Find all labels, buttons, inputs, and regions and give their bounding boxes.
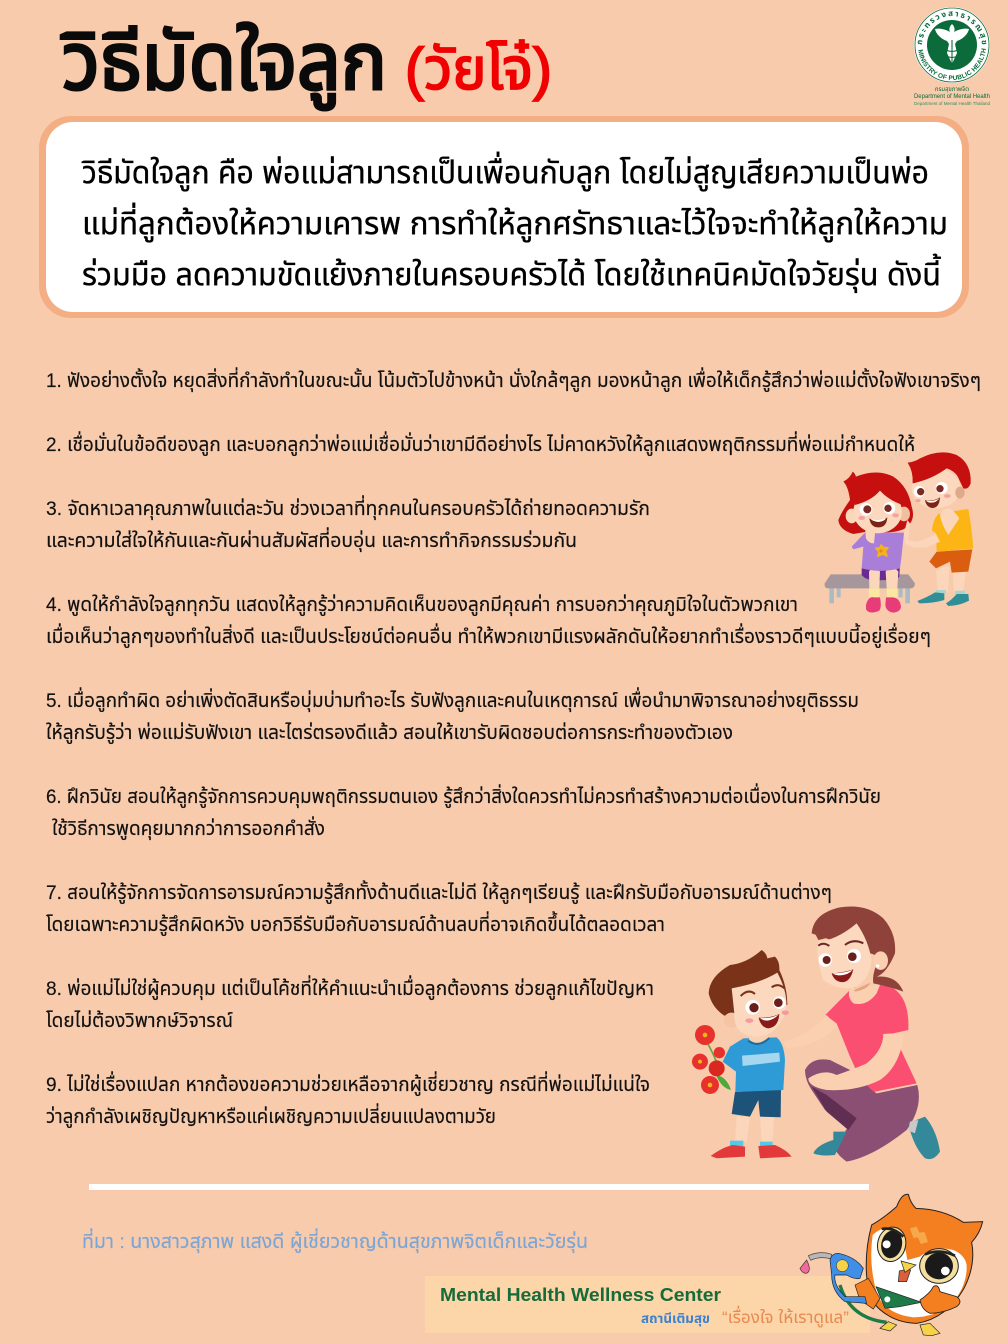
text block: tip 3 — [46, 495, 650, 552]
text block: tip 8: 8. พ่อแม่ไม่ใช่ผู้ควบคุม แต่เป็นโค้ชที่ให้คำแนะนำเมื่อลูกต้องการ ช่วยลูกแก้ไขปัญหา — [46, 975, 654, 1001]
icon: owl mascot with fuel nozzle — [800, 1194, 983, 1336]
banner: Mental Health Wellness Center: “เรื่องใจ ให้เราดูแล” — [722, 1305, 849, 1329]
text block: source credit: ที่มา : นางสาวสุภาพ แสงดี ผู้เชี่ยวชาญด้านสุขภาพจิตเด็กและวัยรุ่น — [82, 1228, 588, 1254]
divider: white bar — [89, 1184, 869, 1190]
panel: definition callout: วิธีมัดใจลูก คือ พ่อแม่สามารถเป็นเพื่อนกับลูก โดยไม่สูญเสียความเป็นพ่อ — [82, 151, 929, 191]
panel: definition callout: ร่วมมือ ลดความขัดแย้งภายในครอบครัวได้ โดยใช้เทคนิคมัดใจวัยรุ่น ดังนี้ — [82, 253, 941, 293]
text block: tip 8: โดยไม่ต้องวิพากษ์วิจารณ์ — [46, 1009, 233, 1032]
text block: tip 9: 9. ไม่ใช่เรื่องแปลก หากต้องขอความช่วยเหลือจากผู้เชี่ยวชาญ กรณีที่พ่อแม่ไม่แน่ใจ — [46, 1071, 650, 1097]
text block: tip 7: โดยเฉพาะความรู้สึกผิดหวัง บอกวิธีรับมือกับอารมณ์ด้านลบที่อาจเกิดขึ้นได้ตลอดเวลา — [46, 911, 665, 937]
text block: tip 6 — [46, 783, 881, 841]
text block: tip 5 — [46, 687, 859, 745]
text block: tip 4: เมื่อเห็นว่าลูกๆของทำในสิ่งดี และเป็นประโยชน์ต่อคนอื่น ทำให้พวกเขามีแรงผลักดันให้อยากทำเรื่องราวดีๆแบบนี้อยู่เรื่อยๆ — [46, 623, 931, 649]
text block: tip 1: 1. ฟังอย่างตั้งใจ หยุดสิ่งที่กำลังทำในขณะนั้น โน้มตัวไปข้างหน้า นั่งใกล้ๆลูก มองหน้าลูก เพื่อให้เด็กรู้สึกว่าพ่อแม่ตั้งใจฟังเขาจริงๆ — [46, 367, 981, 393]
text block: tip 5: ให้ลูกรับรู้ว่า พ่อแม่รับฟังเขา และไตร่ตรองดีแล้ว สอนให้เขารับผิดชอบต่อการกระทำของตัวเอง — [46, 721, 733, 745]
logo: ministry of public health: Department of Mental Health Thailand — [914, 101, 990, 106]
text block: tip 5: 5. เมื่อลูกทำผิด อย่าเพิ่งตัดสินหรือบุ่มบ่ามทำอะไร รับฟังลูกและคนในเหตุการณ์ เพื่อนำมาพิจารณาอย่างยุติธรรม — [46, 687, 859, 713]
text block: tip 9 — [46, 1071, 650, 1129]
title: (วัยโจ๋) — [405, 37, 552, 102]
logo: ministry of public health: กระทรวงสาธารณสุข — [918, 11, 986, 44]
banner: Mental Health Wellness Center — [425, 1276, 870, 1333]
panel: definition callout — [39, 116, 969, 318]
title: วิธีมัดใจลูก — [60, 17, 387, 110]
text block: tip 2: 2. เชื่อมั่นในข้อดีของลูก และบอกลูกว่าพ่อแม่เชื่อมั่นว่าเขามีดีอย่างไร ไม่คาดหวังให้ลูกแสดงพฤติกรรมที่พ่อแม่กำหนดให้ — [46, 431, 915, 457]
banner: Mental Health Wellness Center: สถานีเติมสุข — [641, 1311, 710, 1326]
text block: tip 7 — [46, 880, 832, 937]
text block: tip 6: 6. ฝึกวินัย สอนให้ลูกรู้จักการควบคุมพฤติกรรมตนเอง รู้สึกว่าสิ่งใดควรทำไม่ควรทำสร้างความต่อเนื่องในการฝึกวินัย — [46, 783, 881, 809]
text block: tip 4: 4. พูดให้กำลังใจลูกทุกวัน แสดงให้ลูกรู้ว่าความคิดเห็นของลูกมีคุณค่า การบอกว่าคุณภูมิใจในตัวพวกเขา — [46, 593, 798, 617]
illustration: girl and boy on a bench — [825, 452, 973, 613]
text block: tip 4 — [46, 593, 931, 649]
panel: definition callout: แม่ที่ลูกต้องให้ความเคารพ การทำให้ลูกศรัทธาและไว้ใจจะทำให้ลูกให้ความ — [82, 202, 948, 242]
logo: ministry of public health — [914, 7, 990, 106]
text block: tip 6: ใช้วิธีการพูดคุยมากกว่าการออกคำสั่ง — [52, 816, 325, 841]
logo: ministry of public health: MINISTRY OF PUBLIC HEALTH — [918, 48, 986, 80]
text block: tip 3: 3. จัดหาเวลาคุณภาพในแต่ละวัน ช่วงเวลาที่ทุกคนในครอบครัวได้ถ่ายทอดความรัก — [46, 495, 650, 520]
illustration: mother and son with flowers — [692, 906, 940, 1162]
title — [60, 17, 552, 110]
text block: tip 3: และความใส่ใจให้กันและกันผ่านสัมผัสที่อบอุ่น และการทำกิจกรรมร่วมกัน — [46, 527, 577, 552]
banner: Mental Health Wellness Center: Mental Health Wellness Center — [440, 1285, 721, 1305]
text block: tip 9: ว่าลูกกำลังเผชิญปัญหาหรือแค่เผชิญความเปลี่ยนแปลงตามวัย — [46, 1103, 496, 1129]
logo: ministry of public health: กรมสุขภาพจิต — [935, 87, 969, 93]
text block: tip 8 — [46, 975, 654, 1032]
logo: ministry of public health: Department of Mental Health — [914, 94, 990, 100]
text block: tip 7: 7. สอนให้รู้จักการจัดการอารมณ์ความรู้สึกทั้งด้านดีและไม่ดี ให้ลูกๆเรียนรู้ และฝึกรับมือกับอารมณ์ด้านต่างๆ — [46, 880, 832, 905]
